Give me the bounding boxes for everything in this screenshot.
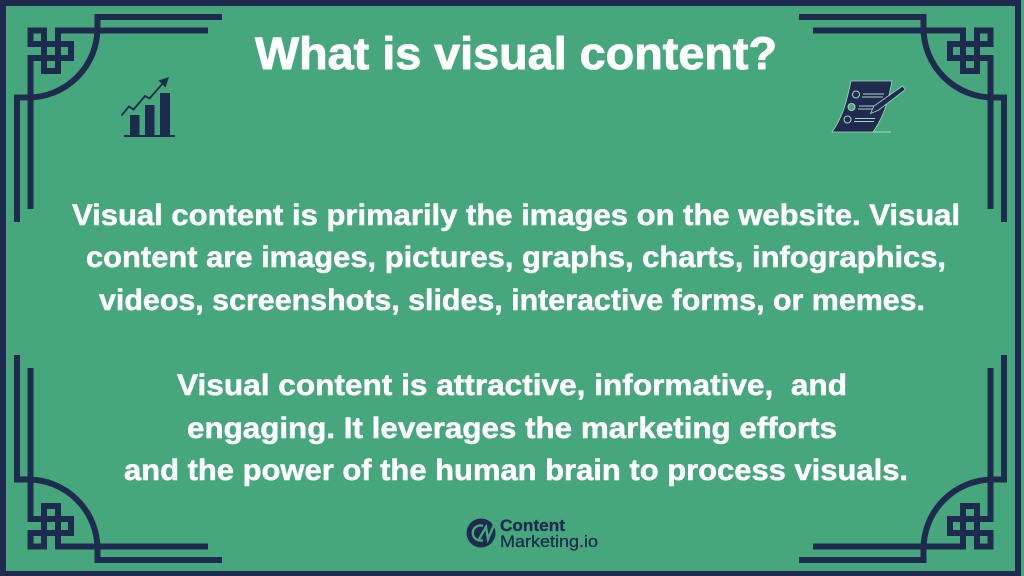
title: What is visual content?	[255, 28, 777, 79]
icon: rising bar chart	[122, 77, 175, 137]
logo: ContentMarketing.io	[466, 516, 598, 551]
logo: ContentMarketing.io: Content	[500, 516, 565, 535]
text block: benefits of visual content: engaging. It leverages the marketing efforts	[187, 412, 837, 445]
corner ornament: bottom left	[17, 355, 222, 560]
corner ornament: bottom right	[799, 355, 1004, 560]
text block: definition of visual content: videos, screenshots, slides, interactive forms, or memes.	[99, 284, 925, 317]
text block: benefits of visual content: and the power of the human brain to process visuals.	[124, 454, 908, 487]
icon: checklist document with pen	[832, 81, 906, 132]
logo: ContentMarketing.io: Marketing.io	[500, 532, 598, 551]
text block: benefits of visual content: Visual content is attractive, informative, and	[177, 369, 847, 402]
corner ornament: top left	[17, 17, 222, 222]
text block: definition of visual content	[72, 199, 960, 317]
text block: definition of visual content: content are images, pictures, graphs, charts, infographics,	[86, 241, 946, 274]
corner ornament: top right	[799, 17, 1004, 222]
text block: definition of visual content: Visual content is primarily the images on the website. Visual	[72, 199, 960, 232]
text block: benefits of visual content	[124, 369, 908, 487]
